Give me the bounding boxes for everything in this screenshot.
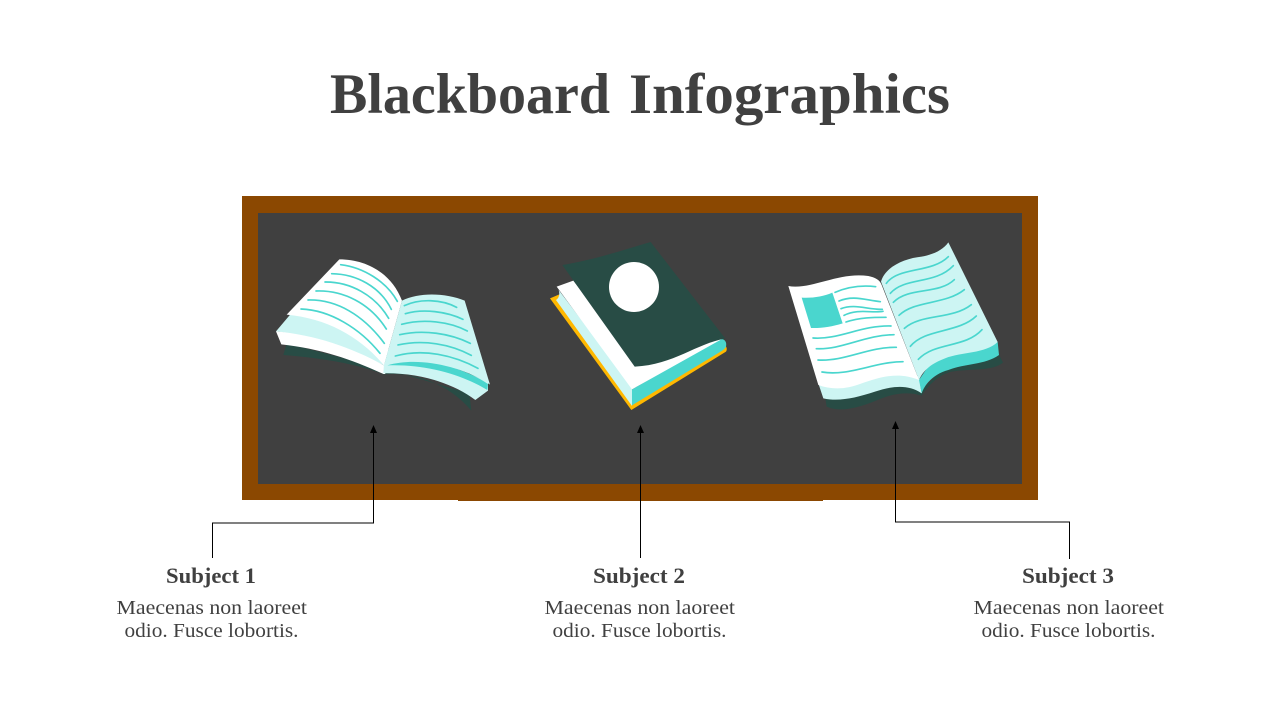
icon: open book left [276, 259, 490, 411]
title [330, 63, 950, 126]
text block: subject 3: Maecenas non laoreet [974, 597, 1164, 619]
arrow: subject 1 [212, 425, 377, 558]
text block: subject 2: Maecenas non laoreet [544, 597, 735, 619]
arrow: subject 3 [892, 421, 1070, 559]
text block: subject 1: Maecenas non laoreet [116, 597, 307, 619]
text block: subject 3: odio. Fusce lobortis. [982, 620, 1156, 642]
title: Blackboard [330, 63, 610, 126]
text block: subject 2 [544, 563, 735, 642]
text block: subject 2: Subject 2 [593, 563, 685, 588]
text block: subject 1: Subject 1 [166, 563, 256, 588]
icon: closed book centre [550, 242, 727, 410]
text block: subject 3: Subject 3 [1022, 563, 1114, 588]
text block: subject 1 [116, 563, 307, 642]
icon: open book right [788, 242, 1003, 409]
text block: subject 3 [974, 563, 1164, 642]
arrow: subject 2 [637, 425, 644, 558]
blackboard [242, 196, 1038, 501]
title: Infographics [629, 63, 950, 126]
text block: subject 2: odio. Fusce lobortis. [552, 620, 726, 642]
text block: subject 1: odio. Fusce lobortis. [124, 620, 298, 642]
